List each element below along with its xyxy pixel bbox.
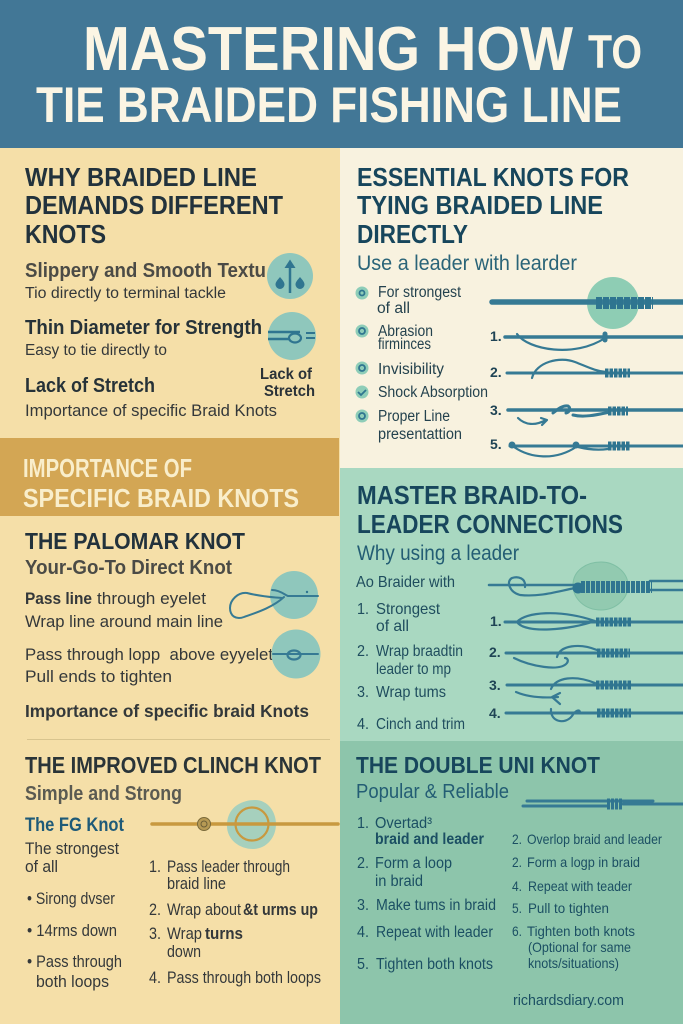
text: fg description: • Pass through	[27, 953, 122, 971]
diagram: step 2	[490, 360, 683, 380]
heading: master braid	[357, 480, 623, 539]
heading: double uni: THE DOUBLE UNI KNOT	[356, 752, 601, 778]
panel: improved clinch	[25, 752, 338, 991]
list: benefits: presentattion	[378, 426, 462, 443]
diagram: step 1	[490, 613, 683, 629]
list: leader steps: leader to mp	[376, 661, 451, 678]
list: leader steps	[356, 574, 465, 733]
list: fg steps: Wrap about	[167, 901, 241, 919]
heading: essential knots: DIRECTLY	[357, 219, 468, 249]
list: benefits: Abrasion	[378, 323, 433, 340]
list: right steps: 2.	[512, 854, 522, 870]
list: left steps	[357, 815, 496, 973]
list: benefits: Invisibility	[378, 361, 444, 378]
text: fg description: • Sirong dvser	[27, 890, 115, 908]
diagram: step 4	[489, 705, 683, 721]
list: right steps: Form a logp in braid	[527, 854, 640, 870]
text: palomar steps	[25, 589, 273, 686]
credit: richardsdiary.com	[513, 992, 624, 1009]
list: left steps: Form a loop	[375, 855, 452, 872]
list: right steps	[512, 831, 662, 971]
list: fg steps: 2.	[149, 901, 161, 919]
diagram: step 1	[490, 328, 683, 350]
list: fg steps: down	[167, 943, 201, 961]
list: right steps: (Optional for same	[528, 939, 631, 955]
list: fg steps: &t urms up	[243, 901, 318, 919]
list: leader steps: 1.	[357, 601, 369, 618]
text: palomar steps: Pass line	[25, 589, 92, 608]
heading: why braided line: WHY BRAIDED LINE	[25, 162, 257, 192]
text: lack of stretch: Importance of specific Braid Knots	[25, 401, 277, 420]
text: palomar steps: Wrap line around main line	[25, 612, 223, 631]
list: left steps: Make tums in braid	[376, 897, 496, 914]
text: importance: Importance of specific braid Knots	[25, 701, 309, 721]
text: fg description	[25, 840, 122, 991]
text: palomar steps: Pull ends to tighten	[25, 667, 172, 686]
heading: master braid: MASTER BRAID-TO-	[357, 480, 587, 510]
diagram: main knot	[492, 277, 683, 329]
list: right steps: Overlop braid and leader	[527, 831, 662, 847]
heading: clinch: THE IMPROVED CLINCH KNOT	[25, 752, 322, 778]
panel: why braided line	[25, 162, 316, 420]
list: leader steps: 2.	[357, 643, 369, 660]
list: benefits	[356, 284, 488, 443]
heading: palomar: THE PALOMAR KNOT	[25, 528, 246, 554]
text: thin diameter	[25, 317, 262, 359]
diagram: step 3: 3.	[489, 677, 501, 693]
subheading: fg knot: The FG Knot	[25, 815, 125, 836]
text: fg description: of all	[25, 858, 58, 876]
diagram: step 1: 1.	[490, 328, 502, 344]
diagram: step 2	[489, 644, 683, 667]
text: thin diameter: Easy to tie directly to	[25, 342, 167, 359]
heading: why braided line	[25, 162, 283, 249]
diagram: step 2: 2.	[489, 644, 501, 660]
text: lack of stretch	[25, 375, 277, 420]
list: left steps: braid and leader	[375, 831, 484, 848]
list: right steps: knots/situations)	[528, 955, 619, 971]
list: benefits: For strongest	[378, 284, 462, 301]
list: benefits: Shock Absorption	[378, 384, 488, 401]
panel: palomar knot	[25, 528, 320, 721]
panel: left background	[0, 148, 339, 1024]
banner: importance of specific braid knots	[0, 438, 339, 516]
banner: importance of specific braid knots: SPECIFIC BRAID KNOTS	[23, 483, 299, 513]
panel: essential knots	[356, 162, 683, 456]
diagram: step 4: 4.	[489, 705, 501, 721]
list: left steps: Overtad³	[375, 815, 432, 832]
icon: slippery arrow and drops	[267, 253, 313, 299]
diagram: step 3	[490, 402, 683, 425]
icon: palomar loop	[230, 571, 318, 619]
subheading: palomar: Your-Go-To Direct Knot	[25, 557, 232, 579]
banner: importance of specific braid knots: IMPORTANCE OF	[23, 453, 192, 483]
diagram: step 1: 1.	[490, 613, 502, 629]
list: left steps: 2.	[357, 855, 369, 872]
text: slippery: Tio directly to terminal tackle	[25, 285, 226, 302]
heading: essential knots: TYING BRAIDED LINE	[357, 190, 603, 220]
list: right steps: Tighten both knots	[527, 923, 635, 939]
text: lack of stretch: Lack of Stretch	[25, 375, 155, 397]
text: palomar steps: through eyelet	[97, 589, 206, 608]
list: left steps: 4.	[357, 924, 369, 941]
diagram: step 5	[490, 436, 683, 456]
list: leader steps: 4.	[357, 716, 369, 733]
list: benefits: Proper Line	[378, 408, 450, 425]
panel: double uni background	[340, 741, 683, 1024]
list: left steps: Tighten both knots	[376, 956, 493, 973]
list: leader steps: Cinch and trim	[376, 716, 465, 733]
icon: palomar knot	[272, 630, 320, 678]
list: right steps: 6.	[512, 923, 522, 939]
list: fg steps: 1.	[149, 858, 161, 876]
text: thin diameter: Thin Diameter for Strength	[25, 317, 262, 339]
list: right steps: 5.	[512, 900, 522, 916]
label: lack of stretch: Stretch	[264, 383, 315, 400]
list: fg steps: Pass through both loops	[167, 969, 321, 987]
subheading: clinch: Simple and Strong	[25, 783, 182, 805]
list: leader steps: Wrap braadtin	[376, 643, 463, 660]
heading: why braided line: DEMANDS DIFFERENT	[25, 190, 283, 220]
diagram: main fg knot	[489, 562, 683, 610]
list: leader steps: Wrap tums	[376, 684, 446, 701]
list: leader steps: Strongest	[376, 601, 441, 618]
title	[36, 15, 642, 133]
list: fg steps: Wrap	[167, 925, 202, 943]
header banner	[0, 0, 683, 148]
list: left steps: Repeat with leader	[376, 924, 493, 941]
title: MASTERING HOW	[83, 15, 573, 84]
subheading: popular: Popular & Reliable	[356, 781, 509, 803]
diagram: step 3: 3.	[490, 402, 502, 418]
title: TIE BRAIDED FISHING LINE	[36, 77, 622, 133]
list: left steps: 3.	[357, 897, 369, 914]
label: lack of stretch: Lack of	[260, 366, 313, 383]
text: fg description: The strongest	[25, 840, 119, 858]
text: slippery	[25, 260, 266, 302]
panel: braid to leader	[356, 480, 683, 733]
heading: essential knots: ESSENTIAL KNOTS FOR	[357, 162, 629, 192]
text: fg description: • 14rms down	[27, 922, 117, 940]
label: lack of stretch	[260, 366, 315, 400]
icon: thin diameter knot	[268, 312, 316, 360]
diagram: step 5: 5.	[490, 436, 502, 452]
subheading: why leader: Why using a leader	[357, 542, 519, 565]
text: fg description: both loops	[36, 973, 109, 991]
title: TO	[588, 25, 642, 78]
list: right steps: 4.	[512, 878, 522, 894]
list: left steps: 1.	[357, 815, 369, 832]
text: slippery: Slippery and Smooth Textu	[25, 260, 266, 282]
panel: double uni knot	[356, 752, 683, 1009]
list: benefits: firminces	[378, 336, 431, 353]
heading: essential knots	[357, 162, 629, 249]
list: fg steps: Pass leader through	[167, 858, 290, 876]
list: leader steps: of all	[376, 618, 409, 635]
panel: essential knots background	[340, 148, 683, 468]
heading: why braided line: KNOTS	[25, 219, 106, 249]
diagram: double uni knot	[523, 801, 683, 806]
list: benefits: of all	[377, 300, 410, 317]
diagram: step 3	[489, 677, 683, 704]
list: fg steps: 4.	[149, 969, 161, 987]
list: right steps: Repeat with teader	[528, 878, 632, 894]
list: right steps: 2.	[512, 831, 522, 847]
list: fg steps	[149, 858, 321, 987]
panel: braid to leader background	[340, 468, 683, 741]
list: left steps: 5.	[357, 956, 369, 973]
heading: master braid: LEADER CONNECTIONS	[357, 509, 623, 539]
list: fg steps: turns	[205, 925, 243, 943]
list: fg steps: 3.	[149, 925, 161, 943]
list: left steps: in braid	[375, 873, 423, 890]
diagram: fg knot ring	[152, 800, 338, 849]
subheading: use a leader: Use a leader with learder	[357, 252, 577, 275]
list: fg steps: braid line	[167, 875, 226, 893]
list: leader steps: Ao Braider with	[356, 574, 455, 591]
text: palomar steps: Pass through lopp above eyyelet	[25, 645, 273, 664]
list: right steps: Pull to tighten	[528, 900, 609, 916]
list: leader steps: 3.	[357, 684, 369, 701]
diagram: step 2: 2.	[490, 364, 502, 380]
